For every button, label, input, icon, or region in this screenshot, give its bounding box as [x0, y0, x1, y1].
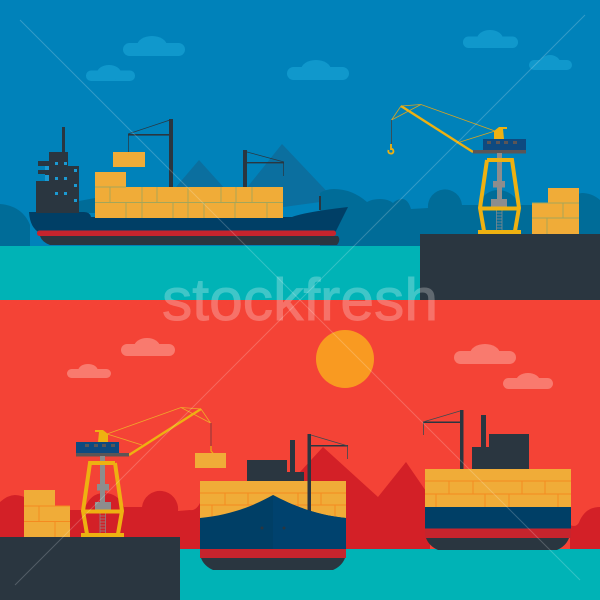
sun [316, 330, 374, 388]
harbour crane: red panel [76, 408, 210, 537]
ship containers [95, 152, 283, 218]
cargo ship: side view [29, 119, 348, 245]
red stripe: bow ship [200, 549, 346, 558]
hills: blue panel [0, 189, 600, 246]
mast: bow ship [308, 434, 348, 512]
cargo ship: stern view [423, 410, 571, 550]
mast: stern ship [423, 410, 464, 469]
crane boom and rigging [392, 104, 495, 152]
ship keel [40, 236, 339, 245]
panel: blue daytime harbour [0, 0, 600, 300]
ship superstructure [36, 127, 79, 213]
cargo ship: bow view [200, 434, 348, 570]
mountains: red panel [300, 447, 430, 549]
container stack: blue panel [532, 188, 579, 234]
crane hook with cable [388, 120, 393, 154]
keel: stern ship [426, 538, 569, 550]
mountains: blue panel [165, 144, 335, 215]
containers: stern ship [425, 469, 571, 507]
hull: stern ship [425, 507, 571, 528]
clouds: blue panel [86, 30, 572, 81]
sea: red panel [180, 549, 600, 600]
bow mast [319, 196, 321, 210]
harbour crane: blue panel [392, 104, 526, 234]
pier: red panel [0, 537, 180, 600]
ship hull [29, 207, 348, 233]
ship red stripe [37, 230, 336, 236]
hoisted container with cable [195, 423, 226, 468]
clouds: red panel [67, 338, 553, 389]
crane cabin [473, 127, 526, 154]
pier: blue panel [420, 234, 600, 300]
sea: blue panel [0, 246, 600, 300]
red stripe: stern ship [425, 528, 571, 538]
hull shadow and portholes [260, 495, 346, 549]
superstructure: stern ship [472, 415, 529, 469]
hills: red panel [0, 491, 600, 549]
crane frame [478, 160, 521, 234]
watermark: stockfresh [162, 267, 438, 333]
hull: bow ship [200, 495, 346, 549]
keel: bow ship [201, 558, 345, 570]
containers: bow ship [200, 481, 346, 518]
panel: red sunset harbour [0, 300, 600, 600]
ship cranes [128, 119, 284, 187]
crane tower column [491, 153, 507, 230]
superstructure: bow ship [247, 440, 304, 481]
container stack: red panel [24, 490, 70, 537]
